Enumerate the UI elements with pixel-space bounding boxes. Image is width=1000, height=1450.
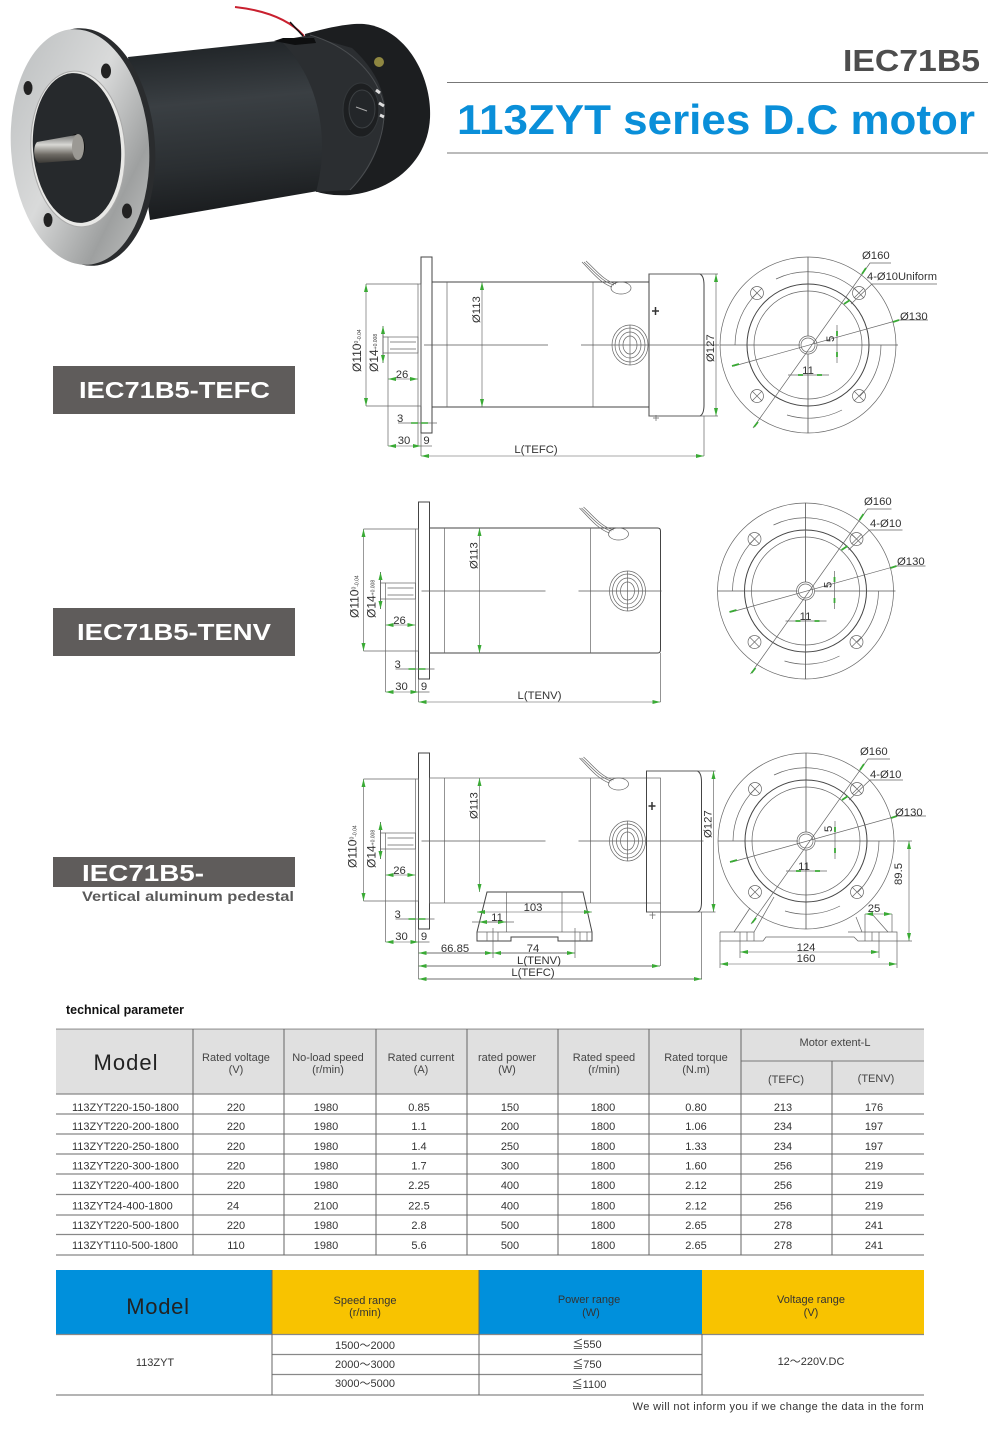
row 8 <box>72 1240 883 1252</box>
side view: TENV: 30 <box>395 681 408 693</box>
row 1: 0.85 <box>408 1102 430 1114</box>
side view: pedestal: 9 <box>421 931 427 943</box>
side view: TEFC: 0 <box>354 341 360 344</box>
table row lines <box>56 1029 924 1255</box>
table header: Rated current <box>388 1052 454 1064</box>
front view: TENV: 5 <box>822 582 834 588</box>
table header: Rated torque <box>664 1052 728 1064</box>
side view: pedestal: Ø110 <box>346 840 360 868</box>
front view: TEFC: 11 <box>802 365 814 377</box>
front view: TENV: 11 <box>800 611 811 623</box>
front view: TEFC: 5 <box>825 336 837 342</box>
footnote: We will not inform you if we change the data in the form <box>633 1401 924 1413</box>
side view: TEFC: +0.008 <box>373 334 379 349</box>
row 8: 500 <box>501 1240 519 1252</box>
row 3: 234 <box>774 1141 792 1153</box>
row 3: 220 <box>227 1141 245 1153</box>
row 2: 113ZYT220-200-1800 <box>72 1121 179 1133</box>
rear fan cover <box>305 24 430 195</box>
row 3 <box>72 1141 883 1153</box>
row 7: 1980 <box>314 1220 338 1232</box>
label: TENV <box>53 608 295 656</box>
row 3: 197 <box>865 1141 883 1153</box>
main title: 113ZYT series D.C motor <box>457 96 975 143</box>
row 7: 2.65 <box>685 1220 707 1232</box>
pedestal base: 66.85 <box>441 943 469 955</box>
row 6: 256 <box>774 1200 792 1212</box>
power range values: ≦1100 <box>572 1377 606 1391</box>
table header: rated power <box>478 1052 536 1064</box>
row 7: 2.8 <box>411 1220 427 1232</box>
row 2: 200 <box>501 1121 519 1133</box>
label: vertical aluminum pedestal: IEC71B5- <box>82 860 204 886</box>
front view: pedestal: 4-Ø10 <box>870 769 901 781</box>
table header: (TENV) <box>858 1073 894 1085</box>
row 7: 1800 <box>591 1220 615 1232</box>
row 7: 278 <box>774 1220 792 1232</box>
row 1: 150 <box>501 1102 519 1114</box>
side view: TENV: +0.008 <box>370 580 376 595</box>
label: TEFC: IEC71B5-TEFC <box>79 377 270 403</box>
side view: pedestal: Ø113 <box>468 792 480 819</box>
row 3: 1.33 <box>685 1141 707 1153</box>
side view: TEFC: -0.04 <box>357 329 363 341</box>
side view: TEFC: 3 <box>397 413 403 425</box>
front view: TENV: 4-Ø10 <box>870 518 901 530</box>
side view: pedestal <box>346 753 716 979</box>
side view: pedestal: 26 <box>393 865 406 877</box>
row 6: 219 <box>865 1200 883 1212</box>
front view: TEFC: 4-Ø10Uniform <box>867 271 937 283</box>
front view: pedestal: 160 <box>797 953 815 965</box>
inner dark disc <box>28 70 126 226</box>
row 7 <box>72 1220 883 1232</box>
row 8: 278 <box>774 1240 792 1252</box>
front view: pedestal: Ø130 <box>895 807 923 819</box>
range table header: Speed range <box>334 1295 396 1307</box>
row 8: 5.6 <box>411 1240 427 1252</box>
row 1: 176 <box>865 1102 883 1114</box>
table header: (N.m) <box>682 1064 710 1076</box>
side view: pedestal: 3 <box>394 909 401 921</box>
row 3: 113ZYT220-250-1800 <box>72 1141 179 1153</box>
range table header: Voltage range <box>777 1294 845 1306</box>
side view: TENV: 0 <box>352 587 358 590</box>
speed range values <box>335 1340 395 1390</box>
row 2: 1.1 <box>411 1121 427 1133</box>
row 1: 113ZYT220-150-1800 <box>72 1102 179 1114</box>
row 4: 220 <box>227 1160 245 1172</box>
table header: (r/min) <box>312 1064 344 1076</box>
table header: (W) <box>498 1064 516 1076</box>
row 1: 213 <box>774 1102 792 1114</box>
range table model cell: 113ZYT <box>136 1357 174 1369</box>
rear body band <box>282 36 385 192</box>
motor photo illustration <box>3 7 430 271</box>
pedestal base: L(TENV) <box>517 955 561 967</box>
table header: Rated speed <box>573 1052 635 1064</box>
row 2: 220 <box>227 1121 245 1133</box>
row 5: 113ZYT220-400-1800 <box>72 1180 179 1192</box>
row 6: 2.12 <box>685 1200 707 1212</box>
range table header <box>56 1270 924 1334</box>
row 4: 1980 <box>314 1160 338 1172</box>
range table header: (r/min) <box>349 1307 381 1319</box>
front view: pedestal: 11 <box>798 861 810 873</box>
front view: pedestal <box>718 746 926 968</box>
row 5: 219 <box>865 1180 883 1192</box>
row 1 <box>72 1102 883 1114</box>
black wire <box>290 22 303 36</box>
row 3: 1.4 <box>411 1141 427 1153</box>
side view: TENV <box>348 502 662 702</box>
side view: TEFC: Ø113 <box>471 296 483 323</box>
row 8: 1800 <box>591 1240 615 1252</box>
side view: pedestal: 30 <box>395 931 408 943</box>
row 5: 400 <box>501 1180 519 1192</box>
side view: TEFC: L(TEFC) <box>514 444 558 456</box>
table header: (r/min) <box>588 1064 620 1076</box>
row 8: 113ZYT110-500-1800 <box>72 1240 178 1252</box>
red wire <box>235 7 304 36</box>
row 8: 110 <box>227 1240 245 1252</box>
row 1: 1980 <box>314 1102 338 1114</box>
front view: pedestal: 5 <box>823 826 835 832</box>
side view: TENV: 9 <box>421 681 427 693</box>
front view: TEFC: Ø130 <box>900 311 928 323</box>
power range values <box>572 1337 606 1391</box>
pedestal base: L(TEFC) <box>511 967 555 979</box>
front view: TEFC <box>720 250 937 433</box>
row 8: 1980 <box>314 1240 338 1252</box>
flange spigot ring <box>26 68 130 230</box>
row 4: 1800 <box>591 1160 615 1172</box>
power range values: ≦750 <box>572 1357 602 1371</box>
row 4: 1.60 <box>685 1160 707 1172</box>
row 5: 2.12 <box>685 1180 707 1192</box>
row 2: 1.06 <box>685 1121 707 1133</box>
front view: TENV: Ø130 <box>897 556 925 568</box>
front view: TEFC: Ø160 <box>862 250 890 262</box>
label: vertical aluminum pedestal: Vertical aluminum pedestal <box>82 889 294 904</box>
row 5 <box>72 1180 883 1192</box>
table header: Rated voltage <box>202 1052 270 1064</box>
pedestal base: 11 <box>491 912 503 924</box>
pedestal base: 103 <box>524 902 542 914</box>
row 6 <box>72 1200 883 1212</box>
label: vertical aluminum pedestal <box>53 857 295 904</box>
row 6: 2100 <box>314 1200 338 1212</box>
row 6: 113ZYT24-400-1800 <box>72 1200 173 1212</box>
speed range values: 2000～3000 <box>335 1359 395 1371</box>
row 6: 400 <box>501 1200 519 1212</box>
side view: pedestal: Ø14 <box>364 845 378 868</box>
table header <box>56 1028 924 1094</box>
side view: pedestal: 0 <box>350 837 356 840</box>
front view: TENV: Ø160 <box>864 496 892 508</box>
drawing: TENV <box>348 496 926 702</box>
row 4: 219 <box>865 1160 883 1172</box>
front view: pedestal: 25 <box>868 903 880 915</box>
side view: TEFC: 26 <box>396 369 408 381</box>
terminal gland <box>343 83 384 137</box>
row 8: 241 <box>865 1240 883 1252</box>
rule below title <box>447 152 988 154</box>
row 5: 1800 <box>591 1180 615 1192</box>
pedestal base: 74 <box>527 943 539 955</box>
row 1: 220 <box>227 1102 245 1114</box>
shaft <box>34 134 85 163</box>
front view: pedestal: 89.5 <box>893 863 905 885</box>
row 4: 300 <box>501 1160 519 1172</box>
side view: TENV: Ø14 <box>364 595 378 618</box>
flange rim <box>9 23 163 271</box>
side view: TEFC <box>350 257 719 456</box>
label: TENV: IEC71B5-TENV <box>77 619 272 645</box>
bolt holes <box>24 64 132 227</box>
row 6: 22.5 <box>408 1200 430 1212</box>
rule above title <box>447 82 988 83</box>
row 2 <box>72 1121 883 1133</box>
table header: (V) <box>229 1064 243 1076</box>
flange face <box>3 24 157 270</box>
side view: TENV: L(TENV) <box>518 690 562 702</box>
power range values: ≦550 <box>572 1337 602 1351</box>
row 4: 256 <box>774 1160 792 1172</box>
section heading: technical parameter: technical parameter <box>66 1003 184 1017</box>
range table <box>56 1270 924 1395</box>
label: TEFC <box>53 366 295 414</box>
row 2: 197 <box>865 1121 883 1133</box>
side view: TENV: -0.04 <box>354 575 360 587</box>
table header: (TEFC) <box>768 1074 804 1086</box>
side view: TEFC: 30 <box>398 435 410 447</box>
side view: TENV: 26 <box>393 615 406 627</box>
front view: pedestal: Ø160 <box>860 746 888 758</box>
side view: TEFC: 9 <box>423 435 430 447</box>
cover gap line <box>310 35 384 190</box>
row 8: 2.65 <box>685 1240 707 1252</box>
drawing: TEFC <box>350 250 937 456</box>
range table header: Model <box>126 1294 190 1319</box>
row 1: 1800 <box>591 1102 615 1114</box>
motor body <box>128 36 324 220</box>
voltage range value: 12～220V.DC <box>778 1356 844 1368</box>
speed range values: 1500～2000 <box>335 1340 395 1352</box>
row 5: 256 <box>774 1180 792 1192</box>
drawing: vertical aluminum pedestal <box>346 746 926 979</box>
top model code: IEC71B5 <box>843 43 980 78</box>
range table header: (V) <box>804 1307 818 1319</box>
side view: TENV: Ø110 <box>348 590 362 618</box>
table header: Model <box>94 1050 158 1075</box>
table header: Motor extent-L <box>800 1037 870 1049</box>
side view: TENV: 3 <box>394 659 401 671</box>
speed range values: 3000～5000 <box>335 1378 395 1390</box>
row 2: 1980 <box>314 1121 338 1133</box>
row 7: 220 <box>227 1220 245 1232</box>
row 5: 2.25 <box>408 1180 430 1192</box>
table header: No-load speed <box>292 1052 364 1064</box>
side view: TEFC: Ø110 <box>350 344 364 372</box>
row 7: 500 <box>501 1220 519 1232</box>
front view: pedestal: 124 <box>797 942 815 954</box>
row 5: 220 <box>227 1180 245 1192</box>
row 7: 113ZYT220-500-1800 <box>72 1220 179 1232</box>
row 5: 1980 <box>314 1180 338 1192</box>
row 3: 250 <box>501 1141 519 1153</box>
side view: pedestal: -0.04 <box>352 825 358 837</box>
row 4 <box>72 1160 883 1172</box>
range table rules <box>56 1270 924 1395</box>
row 7: 241 <box>865 1220 883 1232</box>
range table header: (W) <box>582 1307 600 1319</box>
side view: TEFC: Ø14 <box>367 349 381 372</box>
range table header: Power range <box>558 1294 620 1306</box>
pedestal base <box>418 892 702 979</box>
row 1: 0.80 <box>685 1102 707 1114</box>
side view: TENV: Ø113 <box>468 542 480 569</box>
row 6: 1800 <box>591 1200 615 1212</box>
side view: pedestal: Ø127 <box>702 810 714 838</box>
row 3: 1980 <box>314 1141 338 1153</box>
top terminal boss <box>274 38 316 45</box>
row 6: 24 <box>227 1200 239 1212</box>
table header: (A) <box>414 1064 428 1076</box>
front view: TENV <box>718 496 926 679</box>
row 2: 234 <box>774 1121 792 1133</box>
technical parameter table <box>56 1028 924 1255</box>
row 2: 1800 <box>591 1121 615 1133</box>
row 3: 1800 <box>591 1141 615 1153</box>
row 4: 113ZYT220-300-1800 <box>72 1160 179 1172</box>
side view: TEFC: Ø127 <box>705 334 717 362</box>
row 4: 1.7 <box>411 1160 427 1172</box>
ground lug <box>374 57 384 67</box>
side view: pedestal: +0.008 <box>370 830 376 845</box>
